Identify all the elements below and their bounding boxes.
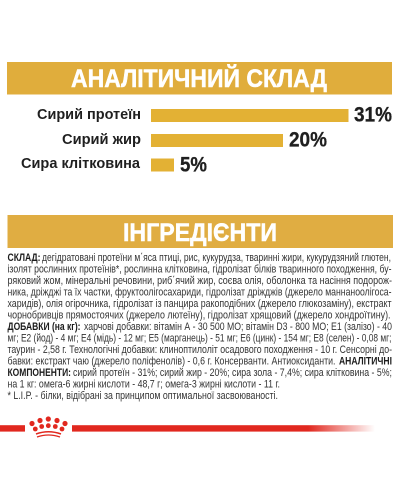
bar row: crude fibre 5%: 5% [180, 152, 207, 176]
panel: analytical composition [7, 62, 392, 176]
text block: ingredients list: * L.I.P. - білки, відібрані за принципом оптимальної засвоюваності. [8, 390, 278, 402]
bar row: crude protein 31%: 31% [354, 102, 392, 126]
heading band: analytical composition [7, 62, 392, 94]
footer red line with fading right end [0, 425, 375, 432]
text block: ingredients list [8, 252, 392, 402]
text block: ingredients list: на 1 кг: омега-6 жирні кислоти - 48,7 г; омега-3 жирні кислоти - 11 г. [8, 378, 280, 390]
bar row: crude protein 31%: Сирий протеїн [37, 107, 141, 123]
bar row: crude fat 20%: 20% [289, 128, 327, 152]
heading band: analytical composition: АНАЛІТИЧНИЙ СКЛАД [71, 63, 327, 93]
bar row: crude fat 20%: Сирий жир [62, 132, 141, 148]
text block: ingredients list: СКЛАД: [8, 252, 40, 264]
bar row: crude fat 20% [62, 128, 327, 152]
heading band: ingredients: ІНГРЕДІЄНТИ [123, 219, 277, 247]
text block: ingredients list: ДОБАВКИ (на кг): [8, 321, 80, 333]
bar row: crude fibre 5%: Сира клітковина [21, 156, 141, 172]
heading band: ingredients [8, 215, 393, 248]
bar row: crude fibre 5% [21, 152, 207, 176]
icon: royal crown logo [29, 416, 68, 437]
text block: ingredients list: КОМПОНЕНТИ: [8, 367, 71, 379]
bar row: crude protein 31% [37, 102, 392, 126]
